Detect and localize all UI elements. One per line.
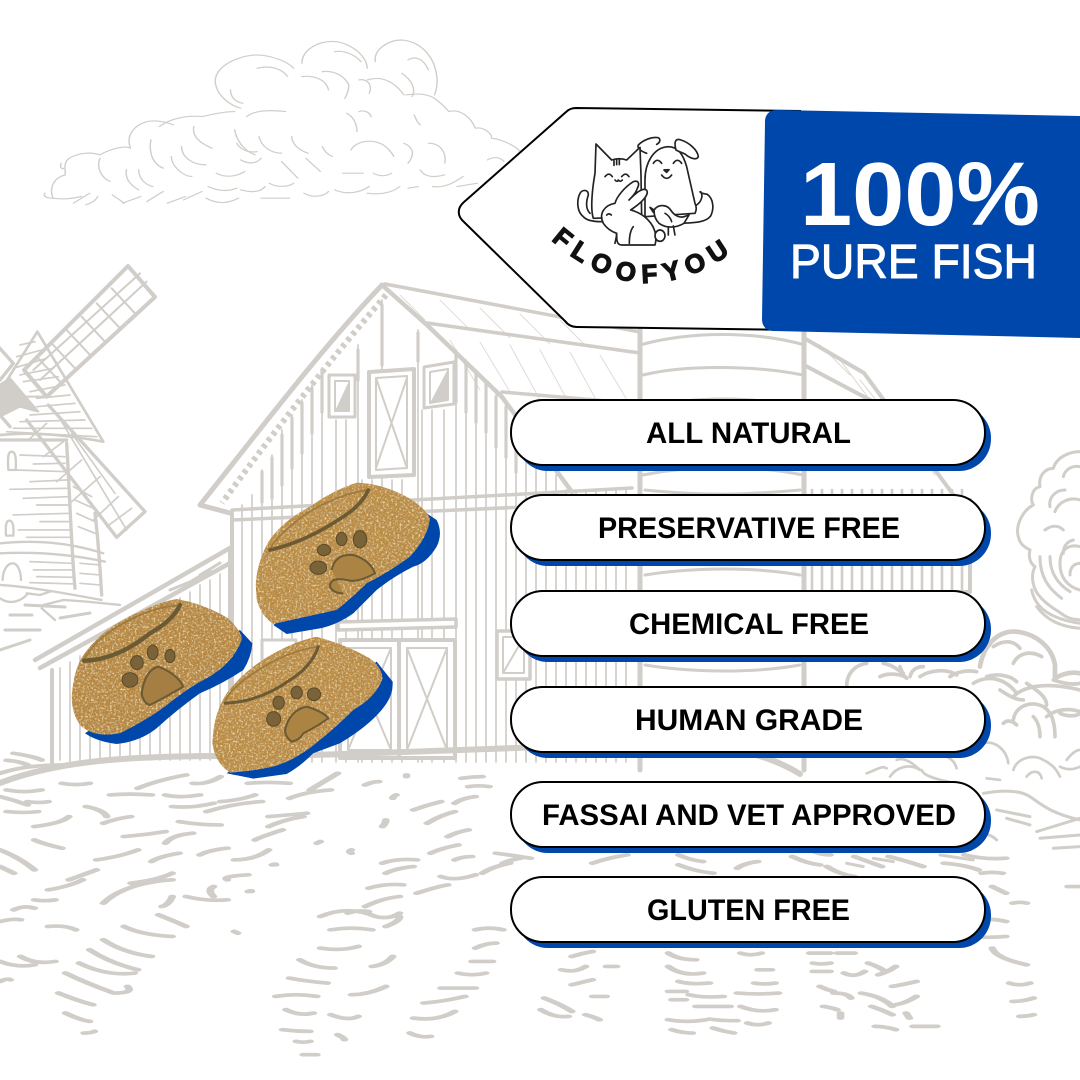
feature pill: all natural: ALL NATURAL: [646, 417, 851, 450]
shed left of barn: [35, 548, 232, 765]
feature pill: gluten free: [511, 877, 991, 948]
sail hub: [0, 378, 38, 417]
icon: egg: [655, 230, 665, 241]
ground line at right: [847, 791, 1080, 867]
silo: [640, 330, 805, 770]
right barn wing: [804, 338, 974, 595]
upper right tree: [1018, 452, 1080, 620]
blue banner: [762, 110, 1080, 338]
feature pill: preservative free: PRESERVATIVE FREE: [598, 512, 900, 545]
feature pill: gluten free: GLUTEN FREE: [647, 894, 850, 927]
banner shape: [762, 110, 1080, 338]
cloud: [44, 40, 520, 205]
feature pill: all natural: [511, 400, 991, 471]
lower sail: [27, 405, 145, 537]
feature pill: fassai and vet approved: [511, 782, 991, 853]
hill under windmill: [0, 605, 90, 650]
biscuit: bottom: [212, 637, 393, 779]
fish biscuits: [72, 483, 440, 779]
biscuit: left: [72, 599, 252, 744]
banner headline: 100%: 100%: [800, 145, 1040, 245]
feature pill: fassai and vet approved: FASSAI AND VET APPROVED: [542, 799, 956, 832]
windmill left sail stubs: [0, 347, 13, 427]
windmill cap: [0, 332, 103, 442]
icon: cat: [592, 144, 642, 218]
barn: [200, 284, 642, 763]
icon: rabbit: [602, 181, 656, 245]
logo: animals: [578, 137, 713, 245]
upper sail: [24, 266, 155, 397]
icon: tails: [578, 190, 713, 223]
field furrows: [0, 753, 1080, 1055]
trees right: [847, 452, 1080, 867]
hill horizon line: [0, 744, 800, 783]
banner subhead: pure fish: PURE FISH: [790, 236, 1037, 289]
icon: bird: [650, 206, 689, 235]
feature pill: chemical free: CHEMICAL FREE: [629, 608, 869, 641]
feature pill: human grade: [511, 687, 991, 758]
biscuit: upper right: [256, 483, 440, 634]
ground at windmill base: [0, 585, 120, 620]
logo tag: [458, 107, 801, 331]
lower bushes: [867, 743, 1080, 782]
windmill windows and door: [3, 452, 21, 580]
tower: [0, 440, 102, 595]
logo wordmark: FLOOFYOU: [552, 226, 728, 284]
middle bush: [980, 632, 1080, 678]
feature pill: preservative free: [511, 495, 991, 566]
feature pill: human grade: HUMAN GRADE: [635, 704, 863, 737]
windmill: [0, 266, 155, 620]
feature pill: chemical free: [511, 591, 991, 662]
icon: dog: [638, 137, 698, 217]
tag shape: [459, 108, 800, 330]
